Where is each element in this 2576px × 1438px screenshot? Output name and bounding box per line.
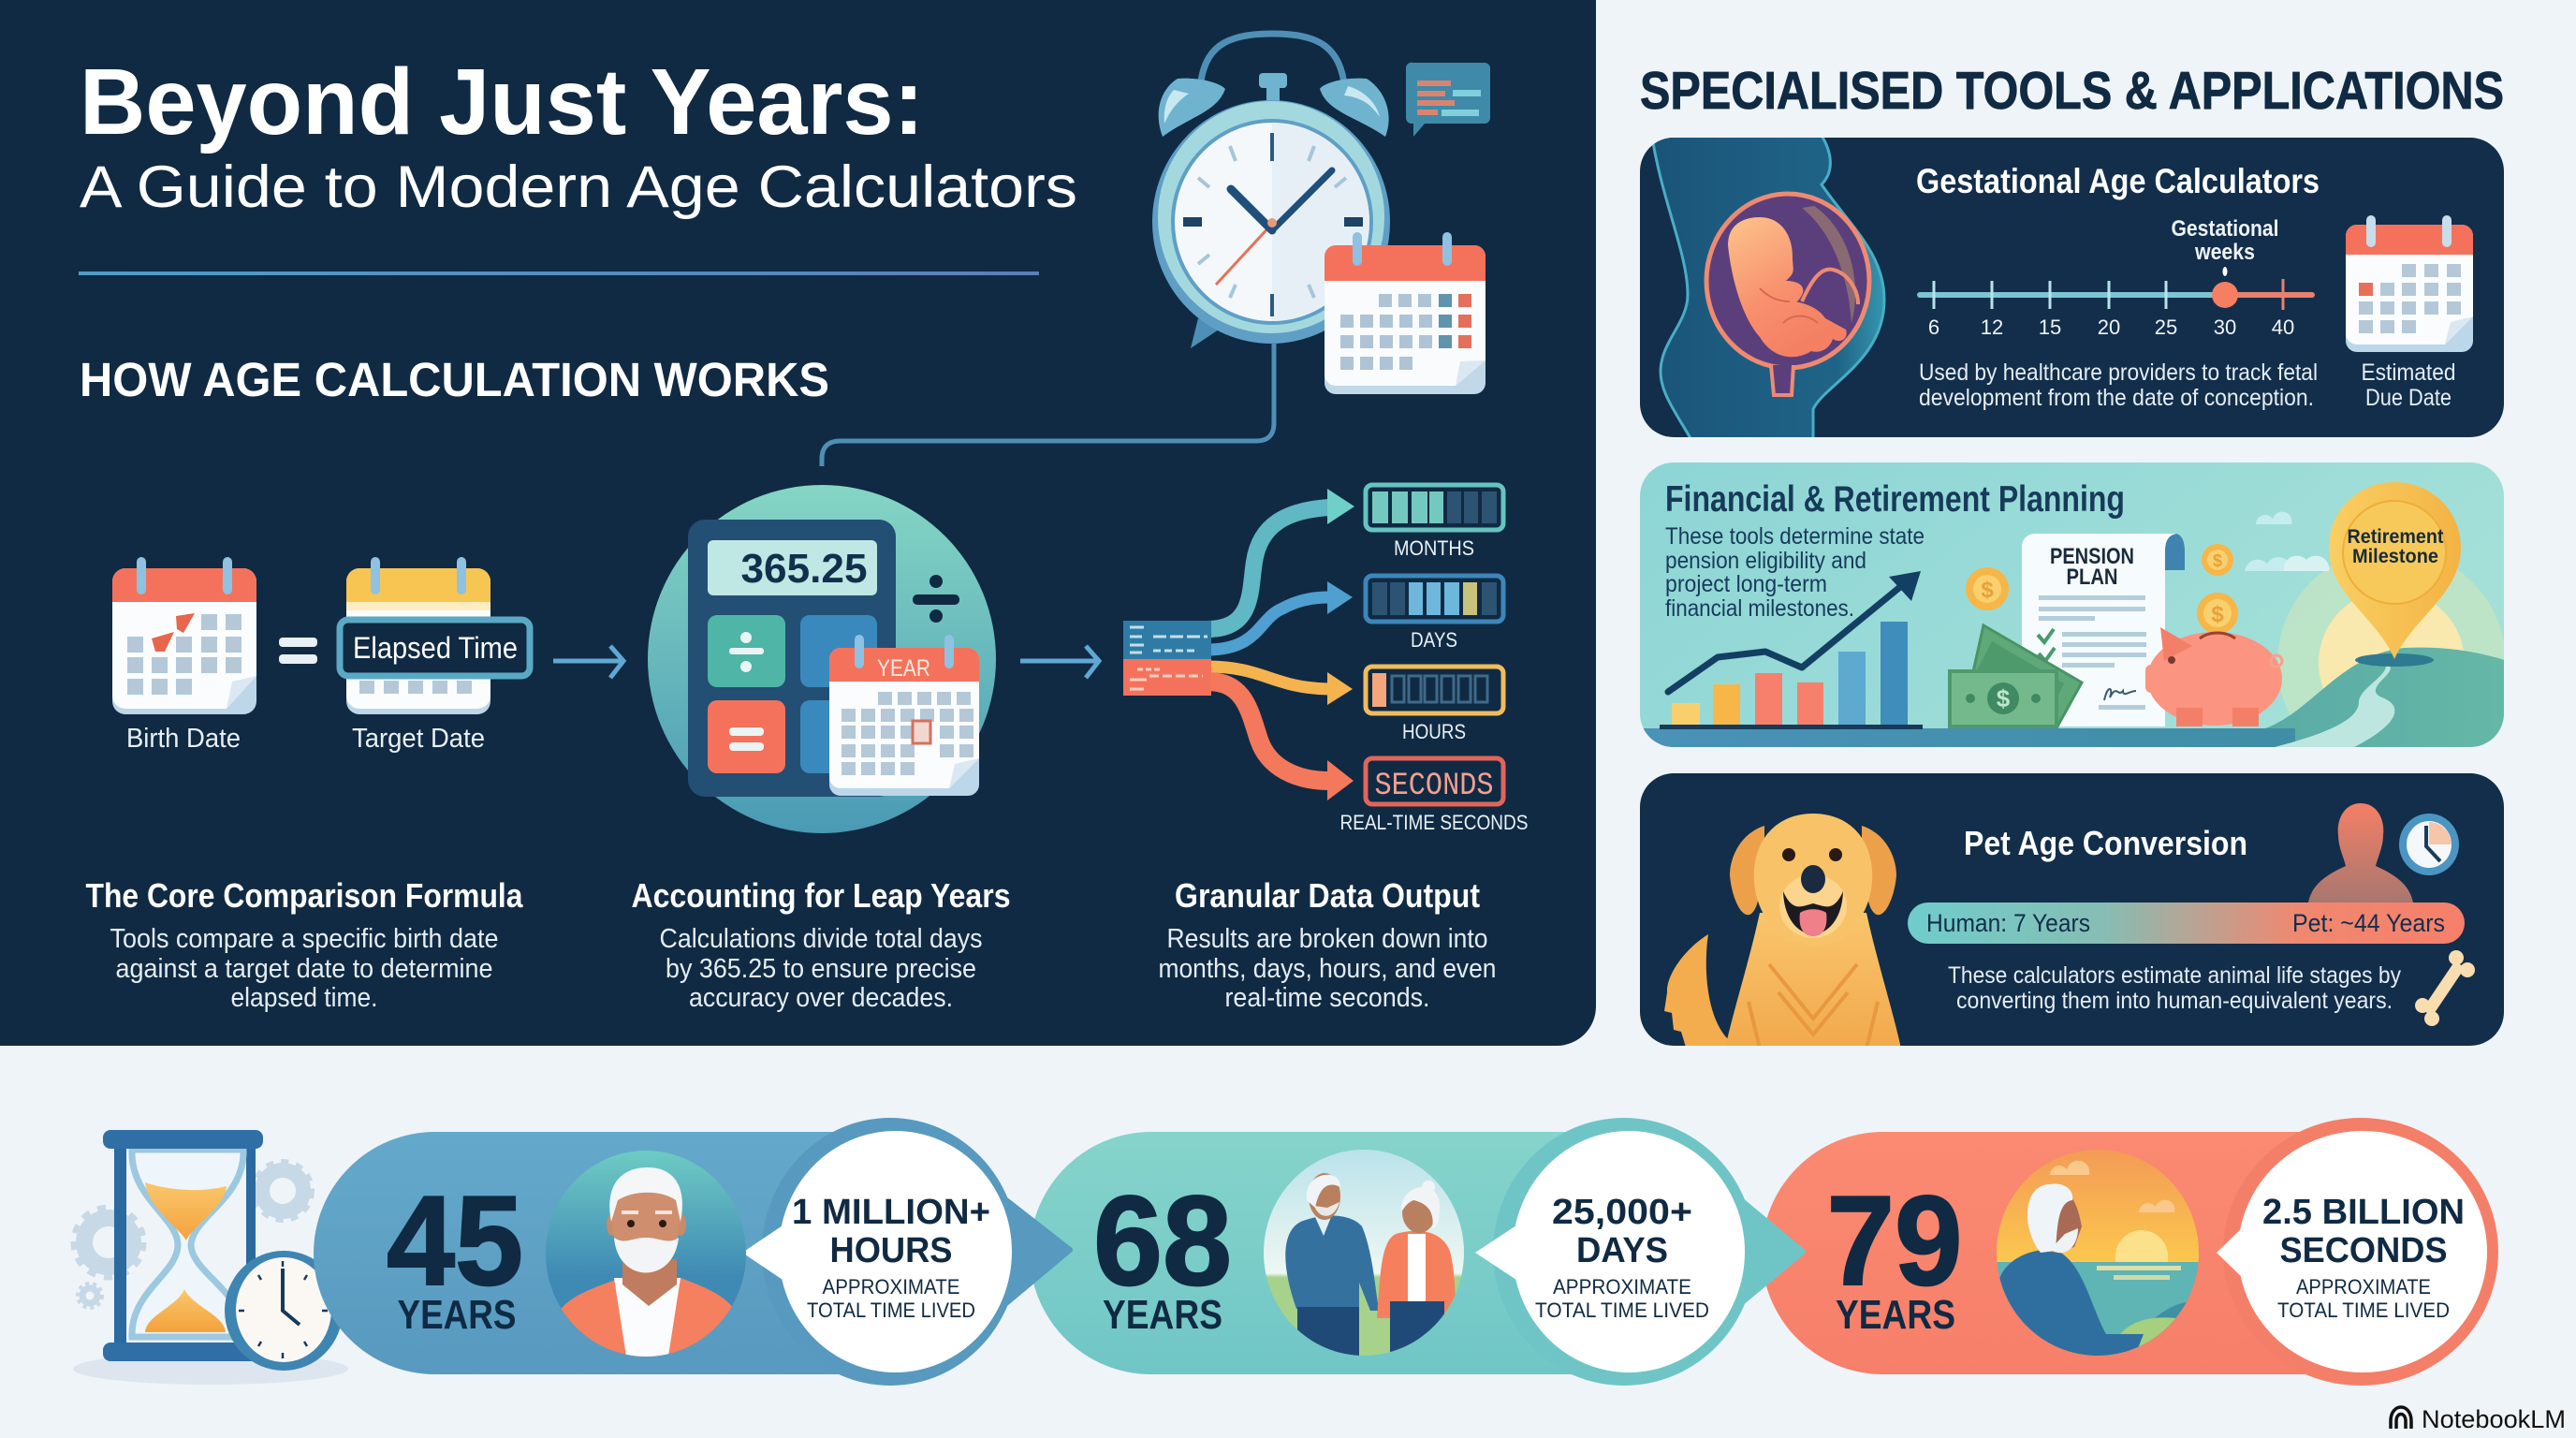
icon: large calendar [1325, 232, 1486, 394]
label: estimated due date [2361, 360, 2456, 411]
text: financial description: project long-term [1665, 571, 1827, 597]
text: 2.5 billion seconds: TOTAL TIME LIVED [2277, 1299, 2450, 1322]
text block: accounting for leap years: Calculations divide total days [659, 924, 983, 954]
icon: pension plan document [2022, 534, 2185, 726]
title: Beyond Just Years: [80, 50, 924, 154]
icon: equals sign [279, 638, 317, 664]
text: financial description: financial milestones. [1665, 595, 1854, 622]
text: 25,000+ days [1535, 1193, 1709, 1322]
text block: accounting for leap years: accuracy over decades. [689, 983, 953, 1013]
stat band: 79 years [1762, 1118, 2498, 1386]
icon: birth date calendar [112, 557, 256, 714]
portrait: man at sunset [1997, 1150, 2199, 1356]
stat band: 45 years: 45 [387, 1169, 523, 1312]
panel: pet age conversion [1640, 773, 2504, 1053]
output: seconds: REAL-TIME SECONDS [1340, 811, 1528, 834]
chart: gestational weeks timeline: 25 [2155, 315, 2177, 339]
panel: financial and retirement planning [1640, 462, 2504, 747]
text block: the core comparison formula [86, 876, 523, 1013]
icon: retirement milestone pin: Milestone [2352, 546, 2438, 567]
label: estimated due date: Due Date [2365, 385, 2452, 411]
callout: elapsed time [340, 620, 530, 676]
icon: calculator with year calendar: 365.25 [741, 546, 867, 592]
arrow: connector line [822, 343, 1274, 466]
label: estimated due date: Estimated [2361, 360, 2456, 386]
text: 2.5 billion seconds: APPROXIMATE [2296, 1275, 2431, 1299]
text block: accounting for leap years: Accounting for Leap Years [631, 876, 1011, 915]
portrait: elderly couple [1259, 1147, 1470, 1363]
icon: bone [2415, 950, 2475, 1026]
label: target date: Target Date [352, 724, 485, 754]
text block: the core comparison formula: The Core Comparison Formula [86, 876, 523, 915]
icon: gold coins: $ [1981, 578, 1994, 603]
chart: gestational weeks timeline: 30 [2214, 315, 2236, 339]
text: financial title: Financial & Retirement Planning [1665, 479, 2125, 520]
icon: chat bubble [1406, 63, 1490, 137]
chart: growth bars and trend arrow [1660, 571, 1923, 729]
output: hours: HOURS [1402, 720, 1466, 743]
output: days [1366, 576, 1503, 652]
text block: accounting for leap years [631, 876, 1011, 1013]
text: pet age description [1948, 962, 2401, 1014]
icon: retirement milestone pin [2329, 482, 2461, 659]
stat band: 79 years: YEARS [1836, 1292, 1955, 1338]
stat band: 68 years: YEARS [1103, 1292, 1222, 1338]
chart: gestational weeks timeline: weeks [2194, 240, 2255, 265]
text: 25,000+ days: TOTAL TIME LIVED [1535, 1299, 1709, 1322]
chart: human to pet age bar: Pet: ~44 Years [2292, 909, 2445, 937]
icon: banknotes: $ [1997, 684, 2011, 712]
text block: the core comparison formula: Tools compare a specific birth date [110, 924, 498, 954]
chart: gestational weeks timeline: Gestational [2172, 216, 2278, 242]
chart: gestational weeks timeline: 20 [2098, 315, 2120, 339]
panel: gestational age calculators [1640, 131, 2504, 445]
text block: accounting for leap years: by 365.25 to ensure precise [666, 954, 976, 984]
output: months [1366, 485, 1503, 560]
text: 25,000+ days: DAYS [1576, 1231, 1668, 1270]
icon: banknotes [1950, 625, 2082, 726]
title [80, 50, 1077, 220]
text: 25,000+ days: APPROXIMATE [1553, 1275, 1691, 1299]
text: 1 million+ hours: TOTAL TIME LIVED [807, 1299, 975, 1322]
illustration: landscape with milestone [1644, 511, 2504, 747]
chart: gestational weeks timeline: 15 [2039, 315, 2061, 339]
output: hours [1366, 667, 1503, 743]
text: gestational age description [1919, 360, 2318, 411]
text block: granular data output: Results are broken down into [1166, 924, 1488, 954]
text: 2.5 billion seconds [2262, 1193, 2465, 1322]
logo: NotebookLM: NotebookLM [2422, 1405, 2566, 1433]
text: financial description: pension eligibility and [1665, 548, 1866, 574]
text: gestational age description: Used by healthcare providers to track fetal [1919, 360, 2318, 386]
icon: gold coins: $ [2213, 551, 2222, 570]
stat band: 68 years: 68 [1093, 1169, 1232, 1312]
icon: target date calendar [346, 557, 490, 714]
title: A Guide to Modern Age Calculators [80, 154, 1077, 220]
arrow: to calculator [553, 646, 623, 678]
callout: elapsed time: Elapsed Time [353, 631, 518, 665]
chart: gestational weeks timeline: 6 [1928, 315, 1939, 339]
icon: calculator with year calendar: YEAR [877, 655, 930, 682]
icon: due date calendar [2346, 215, 2473, 352]
output: months: MONTHS [1394, 536, 1474, 560]
output: days: DAYS [1411, 628, 1457, 652]
text: pet age title: Pet Age Conversion [1964, 824, 2247, 862]
icon: hourglass with clock and gears [73, 1130, 348, 1385]
icon: retirement milestone pin: Retirement [2348, 526, 2443, 548]
stat band: 45 years: YEARS [397, 1292, 517, 1338]
illustration: pregnant body and fetus [1651, 131, 1884, 445]
icon: pension plan document: PLAN [2067, 565, 2117, 590]
chart: gestational weeks timeline: 12 [1981, 315, 2003, 339]
chart: gestational weeks timeline: 40 [2272, 315, 2294, 339]
text: 1 million+ hours [792, 1193, 990, 1322]
heading: how age calculation works: HOW AGE CALCULATION WORKS [80, 353, 829, 406]
text block: granular data output: real-time seconds. [1224, 983, 1430, 1013]
icon: human silhouette [2308, 803, 2413, 902]
text: gestational age title: Gestational Age Calculators [1916, 162, 2320, 200]
text block: granular data output: Granular Data Output [1175, 876, 1480, 915]
icon: small clock [2399, 814, 2459, 875]
icon: gold coins: $ [2211, 602, 2224, 627]
icon: pension plan document: PENSION [2050, 544, 2134, 569]
portrait: older man [543, 1147, 749, 1362]
icon: gold coins [1966, 544, 2238, 634]
text: financial description [1665, 523, 1925, 622]
stat band: 79 years: 79 [1827, 1169, 1962, 1312]
text: 1 million+ hours: APPROXIMATE [822, 1275, 960, 1299]
stat band: 45 years [314, 1118, 1070, 1386]
chart: gestational weeks timeline [1917, 216, 2315, 339]
text: gestational age description: development from the date of conception. [1919, 385, 2314, 411]
text: 1 million+ hours: 1 MILLION+ [792, 1193, 990, 1232]
text block: granular data output [1159, 876, 1496, 1013]
icon: calculator with year calendar [648, 485, 996, 833]
text: financial description: These tools determine state [1665, 523, 1925, 550]
text: pet age description: converting them into human-equivalent years. [1956, 988, 2393, 1014]
chart: human to pet age bar [1908, 902, 2465, 944]
arrow: to data output [1020, 646, 1099, 678]
icon: alarm clock [1152, 34, 1390, 348]
text: 2.5 billion seconds: 2.5 BILLION [2262, 1193, 2465, 1232]
text: pet age description: These calculators estimate animal life stages by [1948, 962, 2401, 989]
text: 1 million+ hours: HOURS [829, 1231, 953, 1270]
text block: the core comparison formula: elapsed time. [230, 983, 378, 1013]
text: 25,000+ days: 25,000+ [1552, 1193, 1692, 1232]
chart: data flow splitting into outputs [1123, 489, 1354, 800]
icon: piggy bank [2145, 627, 2282, 726]
output: seconds [1340, 758, 1528, 834]
illustration: golden retriever [1664, 814, 1902, 1053]
text block: the core comparison formula: against a target date to determine [116, 954, 492, 984]
text: 2.5 billion seconds: SECONDS [2280, 1231, 2447, 1270]
panel: how age calculation works [0, 0, 1596, 1046]
label: birth date: Birth Date [126, 724, 241, 754]
output: seconds: SECONDS [1374, 769, 1494, 804]
chart: human to pet age bar: Human: 7 Years [1926, 909, 2090, 937]
text block: granular data output: months, days, hours, and even [1159, 954, 1496, 984]
stat band: 68 years [1030, 1118, 1803, 1386]
